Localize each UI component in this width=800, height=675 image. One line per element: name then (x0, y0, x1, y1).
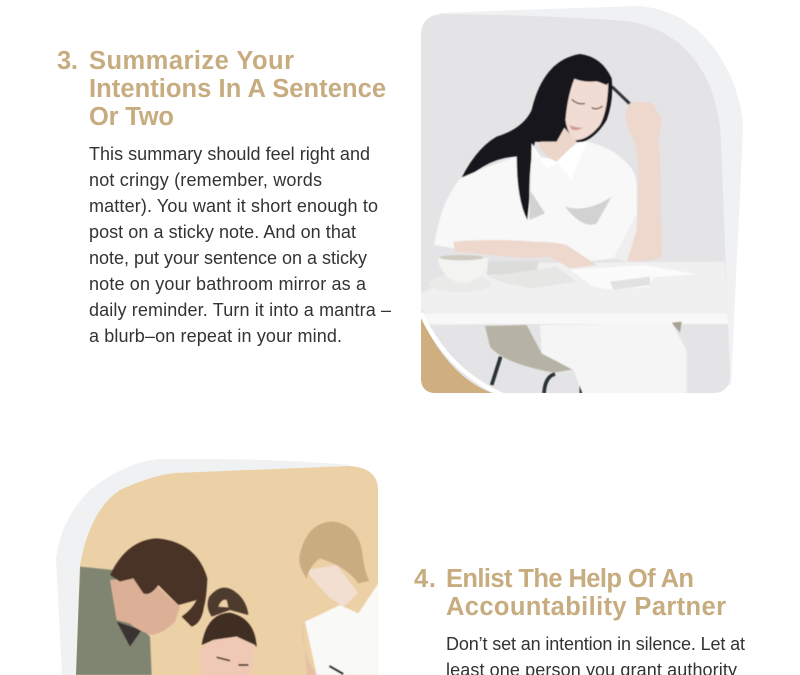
notebooks and papers (487, 261, 538, 275)
blonde woman top (305, 583, 378, 675)
hair front (540, 66, 612, 142)
gold corner accent with white curve (421, 313, 505, 396)
shirt (434, 142, 637, 263)
back shape: grey blob behind photo 2 (56, 459, 350, 675)
section 3: body text: a blurb–on repeat in your mind. (89, 326, 342, 346)
pen (613, 87, 630, 104)
section 3: body text: post on a sticky note. And on that (89, 222, 356, 242)
section 3: heading: Summarize Your (89, 47, 294, 75)
neck (538, 127, 577, 162)
collar (542, 140, 586, 168)
centre woman bun (208, 588, 248, 617)
table (420, 262, 728, 325)
section 4: heading: Enlist The Help Of An (446, 565, 694, 593)
section 3: heading: 3. (57, 47, 78, 75)
chair legs (492, 357, 581, 393)
hair back (457, 54, 612, 222)
section 3: body text: note on your bathroom mirror as a (89, 274, 367, 294)
section 4: heading (414, 565, 726, 621)
section 4: heading: Accountability Partner (446, 593, 726, 621)
forearm raised (625, 102, 662, 261)
hand on head (626, 102, 659, 115)
section 3: body text: note, put your sentence on a sticky (89, 248, 367, 268)
section 3: heading: Or Two (89, 103, 174, 131)
face (565, 78, 608, 140)
section 3: body text: daily reminder. Turn it into a mantra – (89, 300, 391, 320)
section 3: body text: matter). You want it short enough to (89, 196, 378, 216)
section 3: body text (89, 144, 391, 346)
section 4: heading: 4. (414, 565, 436, 593)
section 3: heading: Intentions In A Sentence (89, 75, 386, 103)
photo 2: three colleagues (70, 460, 380, 675)
photo 1: woman at desk (420, 10, 733, 395)
centre woman face (198, 637, 255, 675)
blonde woman hair (299, 522, 369, 583)
chair seat (485, 325, 573, 373)
man face (110, 577, 180, 635)
section 4: body text: Don’t set an intention in silence. Let at (446, 634, 745, 654)
pen in hand (329, 666, 343, 674)
section 3: heading (57, 47, 386, 131)
centre woman hair (202, 613, 257, 647)
arm on table (453, 240, 597, 268)
back shape: grey blob behind photo 1 (421, 6, 743, 393)
section 4: body text (446, 634, 745, 675)
shirt shadows (529, 190, 612, 225)
trousers (540, 323, 687, 395)
right sleeve (616, 220, 637, 261)
section 3: body text: not cringy (remember, words (89, 170, 322, 190)
eyes and lips (572, 99, 603, 109)
man hair (110, 538, 207, 627)
section 3: body text: This summary should feel right and (89, 144, 370, 164)
blonde woman face (305, 565, 358, 607)
man shirt (75, 567, 152, 675)
saucer and cup (429, 274, 491, 293)
